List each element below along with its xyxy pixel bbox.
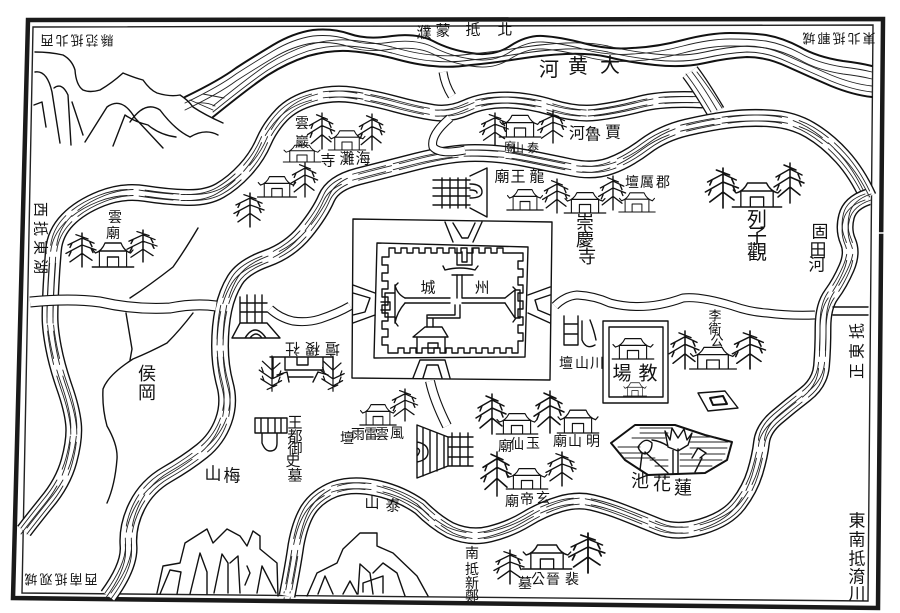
label: Taishan Miao: 泰山廟 <box>504 139 539 155</box>
thin double-line canals crossing east and west <box>30 72 868 426</box>
temple: Yun Miao with trees <box>66 230 157 267</box>
city labels: 城州 <box>420 280 490 296</box>
label: north direction at top: 北抵蒙濮 <box>416 22 513 42</box>
river: connecting channel between Yellow River and moat rivers <box>686 72 722 112</box>
label: top-left corner direction: 縣范抵北西 <box>38 32 114 48</box>
upside-down altar compound <box>259 356 344 391</box>
Hou Gang ridge lines <box>103 228 198 503</box>
city gates <box>353 222 550 378</box>
label: Taishan: 泰山 <box>364 494 401 514</box>
label: Yuxian Miao: 玉仙廟 <box>498 435 540 454</box>
label: Feng Yun Lei Yu altar: 風雲雷雨壇 <box>340 425 404 446</box>
tomb: Wang Duyushi <box>255 418 287 451</box>
crenellated battlements <box>382 248 523 353</box>
lotus pond <box>611 425 732 475</box>
label: Yun Miao: 雲廟 <box>106 209 122 241</box>
north tower <box>443 248 478 275</box>
label: Gutian River: 固田河 <box>808 222 828 274</box>
temple with two trees by the river bend <box>234 163 318 227</box>
label: south direction: 南抵新鄭 <box>465 545 479 604</box>
label: Li Wei Gong: 李衛公 <box>708 308 724 348</box>
label: small vertical temple name: 雲巖 <box>295 115 309 150</box>
label: Xuandi Miao: 玄帝廟 <box>505 490 550 509</box>
label: southeast direction: 東南抵淯川 <box>848 512 866 604</box>
label: Chongqing Si: 崇慶寺 <box>576 213 596 267</box>
label: upside-down Sheji altar: 壇稷社 <box>280 340 340 358</box>
label: Haitan Si: 海灘寺 <box>320 150 371 170</box>
west tower <box>381 283 405 326</box>
shrine: Li Wei Gong <box>669 331 765 369</box>
river: right and southern loop with Taishan arc <box>284 194 871 599</box>
temple: Xuandi Miao <box>481 452 576 496</box>
yamen building <box>413 327 448 353</box>
top-left ridge line and mountains <box>34 52 223 148</box>
label: Jialu River: 賈魯河 <box>569 124 621 144</box>
east tower <box>505 287 520 322</box>
altar: Feng Yun Lei Yu Tan <box>360 389 418 425</box>
bottom mountain: Meishan <box>157 529 278 596</box>
label: Meishan: 梅山 <box>204 464 240 486</box>
label: Shan Chuan altar: 壇山川 <box>559 355 604 371</box>
drill ground: Jiao Chang enclosure <box>603 321 668 403</box>
altar: Shan Chuan Tan <box>564 316 596 347</box>
label: Liezi Guan: 列子觀 <box>747 208 767 264</box>
label: top-right corner direction: 東北抵鄆城 <box>800 30 876 46</box>
outer enclosure <box>352 219 552 380</box>
bridge: south bridge <box>417 425 473 478</box>
label: Hou Gang: 侯岡 <box>138 364 156 403</box>
temple: Liezi Guan <box>705 163 804 208</box>
temples: Longwang Miao and Chongqing Si group <box>507 176 655 213</box>
label: west direction on left edge: 西抵東湖 <box>32 202 48 278</box>
label: Yellow River: 大黄河 <box>539 54 620 81</box>
label: Jiao Chang: 教場 <box>612 362 658 384</box>
label: Jun Li Tan: 郡厲壇 <box>625 174 670 190</box>
river: Gutian river main loop <box>105 115 871 599</box>
tomb: Pei Jin Gong <box>494 533 605 584</box>
label: Pei Jin Gong tomb: 裴晉公墓 <box>518 571 579 591</box>
label: Longwang Miao: 龍王廟 <box>494 168 545 186</box>
bridge: north gate bridge <box>433 168 487 217</box>
temple: Taishan shrine near Jialu River <box>480 111 566 145</box>
walled city <box>352 219 552 380</box>
small diamond platform <box>698 391 738 411</box>
inner wall <box>374 243 528 358</box>
label: east direction on right edge: 正東抵 <box>848 319 866 379</box>
bottom mountain: Taishan <box>307 533 428 596</box>
river: Jialu river running across the upper map <box>21 91 706 534</box>
label: Mingshan Miao: 明山廟 <box>553 433 600 449</box>
label: Wang Duyushi tomb: 王都御史墓 <box>285 414 303 484</box>
central streets <box>405 275 505 327</box>
bridge: west bridge <box>232 295 280 338</box>
river: Yellow River along the top <box>185 30 872 117</box>
temple: Haitan Si group <box>283 113 385 162</box>
label: Lotus Pond: 蓮花池 <box>631 471 692 498</box>
label: southwest corner direction: 西南抵观城 <box>22 572 98 586</box>
temples: Yuxian Miao and Mingshan Miao <box>476 391 599 434</box>
